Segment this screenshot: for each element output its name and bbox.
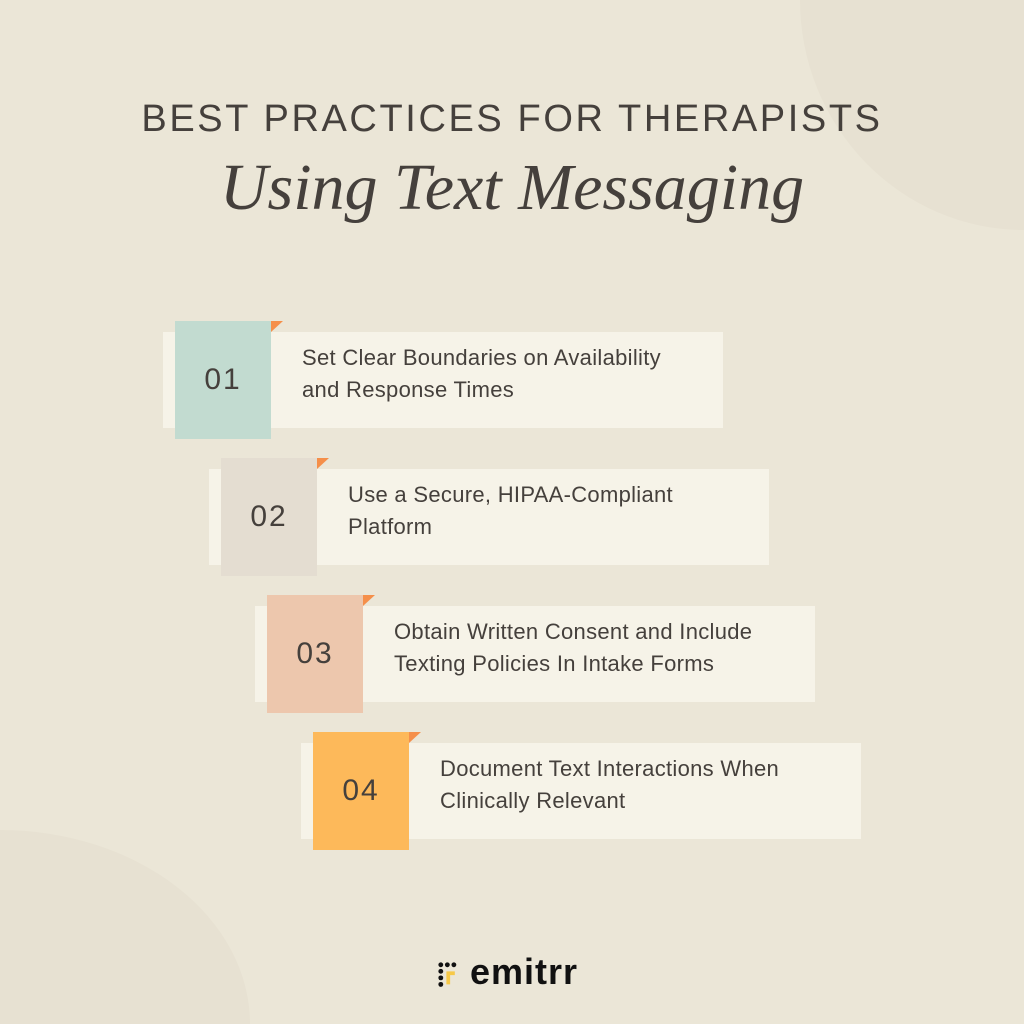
card 2 <box>209 458 769 576</box>
card 3: Obtain Written Consent and Include <box>394 619 752 644</box>
card 4: Clinically Relevant <box>440 788 625 813</box>
card 3 <box>255 595 815 713</box>
card 4 <box>301 732 861 850</box>
card 1: 01 <box>204 363 242 396</box>
card 4: Document Text Interactions When <box>440 756 779 781</box>
card 2: Use a Secure, HIPAA-Compliant <box>348 482 673 507</box>
card 3: Texting Policies In Intake Forms <box>394 651 714 676</box>
card 4: 04 <box>342 774 380 807</box>
title: BEST PRACTICES FOR THERAPISTS <box>141 98 883 140</box>
script subtitle: Using Text Messaging <box>220 151 804 224</box>
card 1 <box>163 321 723 439</box>
card 1: Set Clear Boundaries on Availability <box>302 345 661 370</box>
card 2: Platform <box>348 514 432 539</box>
card 1: and Response Times <box>302 377 514 402</box>
logo: emitrr <box>470 951 578 992</box>
card 3: 03 <box>296 637 334 670</box>
card 2: 02 <box>250 500 288 533</box>
